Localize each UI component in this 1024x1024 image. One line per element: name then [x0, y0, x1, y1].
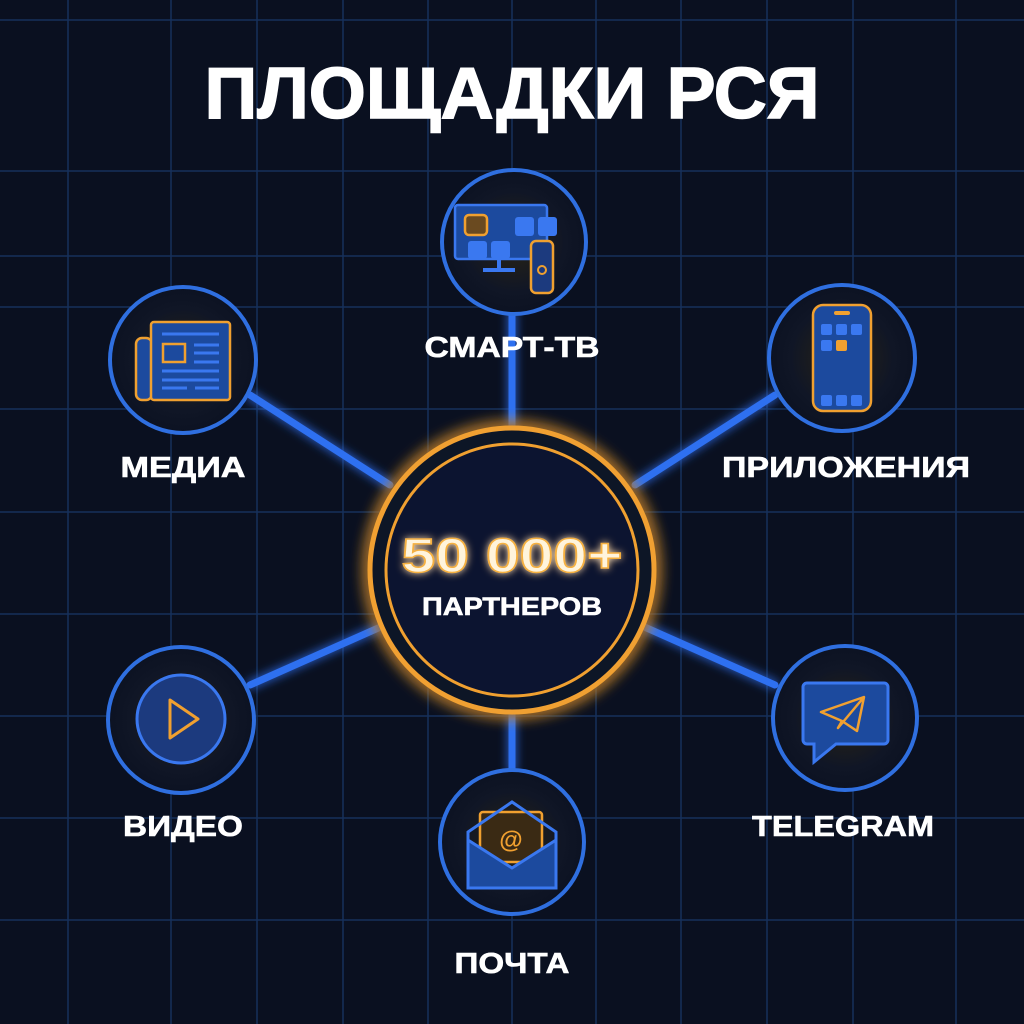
label: ВИДЕО — [123, 811, 243, 843]
subtitle: ПАРТНЕРОВ — [422, 593, 602, 621]
icon: phone — [813, 305, 871, 411]
icon: envelope: @ — [499, 827, 523, 854]
node: video — [108, 647, 254, 843]
node: mail — [440, 770, 584, 980]
center circle — [370, 428, 654, 712]
icon: envelope — [468, 802, 556, 888]
icon: chat telegram — [803, 683, 888, 762]
connector lines — [250, 312, 775, 770]
label: ПОЧТА — [454, 948, 570, 980]
label: МЕДИА — [120, 452, 246, 484]
node: apps — [722, 285, 970, 484]
title: ПЛОЩАДКИ РСЯ — [204, 54, 820, 134]
icon: tv — [455, 205, 557, 293]
label: ПРИЛОЖЕНИЯ — [722, 452, 970, 484]
node: telegram — [752, 646, 934, 843]
node: media — [110, 287, 256, 484]
big number: 50 000+ — [402, 530, 622, 583]
label: СМАРТ-ТВ — [424, 332, 600, 364]
node: smart tv — [424, 170, 600, 364]
icon: play — [137, 675, 225, 763]
icon: newspaper — [136, 322, 230, 400]
label: TELEGRAM — [752, 811, 934, 843]
